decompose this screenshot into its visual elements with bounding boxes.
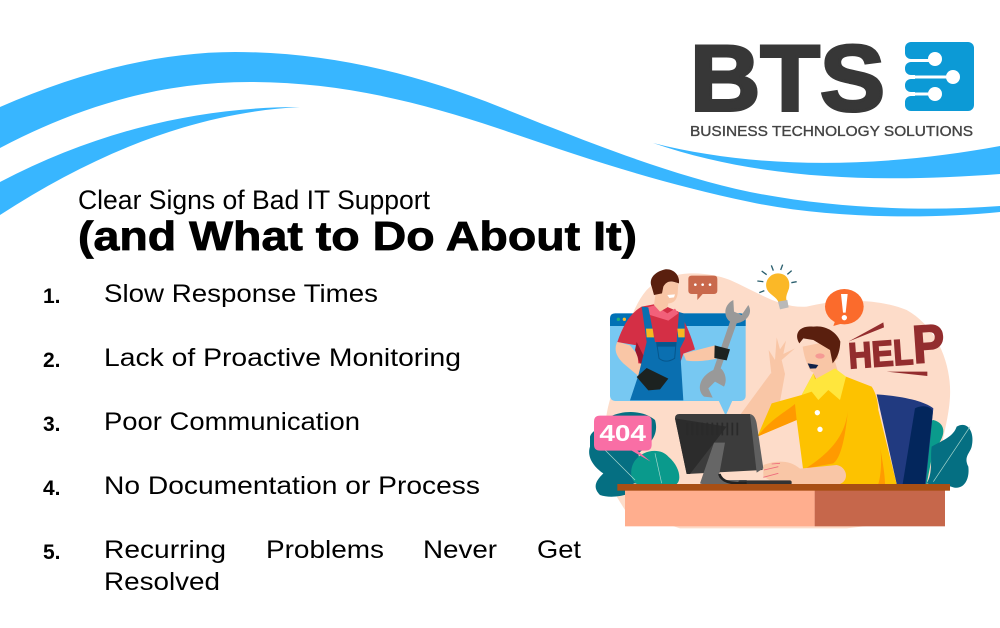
item 5: 5. bbox=[43, 541, 61, 564]
404 error bubble: 404 bbox=[599, 420, 646, 446]
collar bbox=[802, 368, 846, 400]
right plant bbox=[923, 420, 973, 488]
logo wordmark: BTS bbox=[690, 26, 885, 130]
face bbox=[803, 340, 838, 373]
logo icon bbox=[905, 42, 974, 111]
title line 2: (and What to Do About It) bbox=[78, 213, 637, 259]
item 3: 3. bbox=[43, 413, 61, 436]
speech bubble with dots bbox=[688, 276, 717, 300]
typing hand and forearm bbox=[763, 462, 846, 484]
peach background blob bbox=[605, 273, 950, 528]
item 5: Recurring bbox=[104, 536, 226, 564]
title line 1: Clear Signs of Bad IT Support bbox=[78, 185, 430, 215]
exclamation bubble bbox=[825, 289, 864, 326]
HELP lettering bbox=[846, 314, 947, 380]
video window bbox=[610, 313, 746, 416]
technician head bbox=[654, 282, 678, 312]
shirt bbox=[757, 373, 897, 484]
header waves bbox=[0, 52, 1000, 216]
numbered list bbox=[43, 280, 581, 596]
raised arm bbox=[740, 373, 785, 433]
glove bbox=[637, 368, 668, 390]
item 2: Lack of Proactive Monitoring bbox=[104, 344, 461, 372]
item 5: Get bbox=[537, 536, 581, 564]
HELP lettering: P bbox=[911, 314, 947, 375]
404 error bubble bbox=[594, 416, 652, 462]
item 4: 4. bbox=[43, 477, 61, 500]
item 2: 2. bbox=[43, 349, 61, 372]
shirt buttons bbox=[815, 410, 823, 432]
logo tagline: BUSINESS TECHNOLOGY SOLUTIONS bbox=[690, 124, 973, 140]
item 4: No Documentation or Process bbox=[104, 472, 480, 500]
left plant bbox=[589, 412, 679, 497]
overalls bbox=[630, 307, 685, 400]
wrench bbox=[700, 300, 750, 398]
technician collar bbox=[647, 305, 678, 321]
chair bbox=[877, 394, 933, 484]
item 5: Resolved bbox=[104, 568, 220, 596]
item 1: Slow Response Times bbox=[104, 280, 378, 308]
neck bbox=[813, 362, 840, 390]
illustration: IT support help scene bbox=[589, 265, 973, 528]
monitor bbox=[675, 414, 792, 486]
item 5: Problems bbox=[266, 536, 384, 564]
seated man bbox=[740, 326, 933, 484]
logo bbox=[690, 26, 974, 140]
technician arms bbox=[616, 342, 648, 377]
item 3: Poor Communication bbox=[104, 408, 360, 436]
technician shirt bbox=[617, 303, 695, 363]
desk bbox=[617, 484, 950, 526]
icon: light bulb bbox=[757, 265, 797, 309]
item 5: Never bbox=[423, 536, 497, 564]
title bbox=[78, 185, 637, 259]
HELP lettering: HEL bbox=[847, 330, 922, 376]
technician on video call window bbox=[610, 269, 750, 416]
item 1: 1. bbox=[43, 285, 61, 308]
item 5 bbox=[43, 536, 581, 596]
hair bbox=[797, 326, 840, 363]
